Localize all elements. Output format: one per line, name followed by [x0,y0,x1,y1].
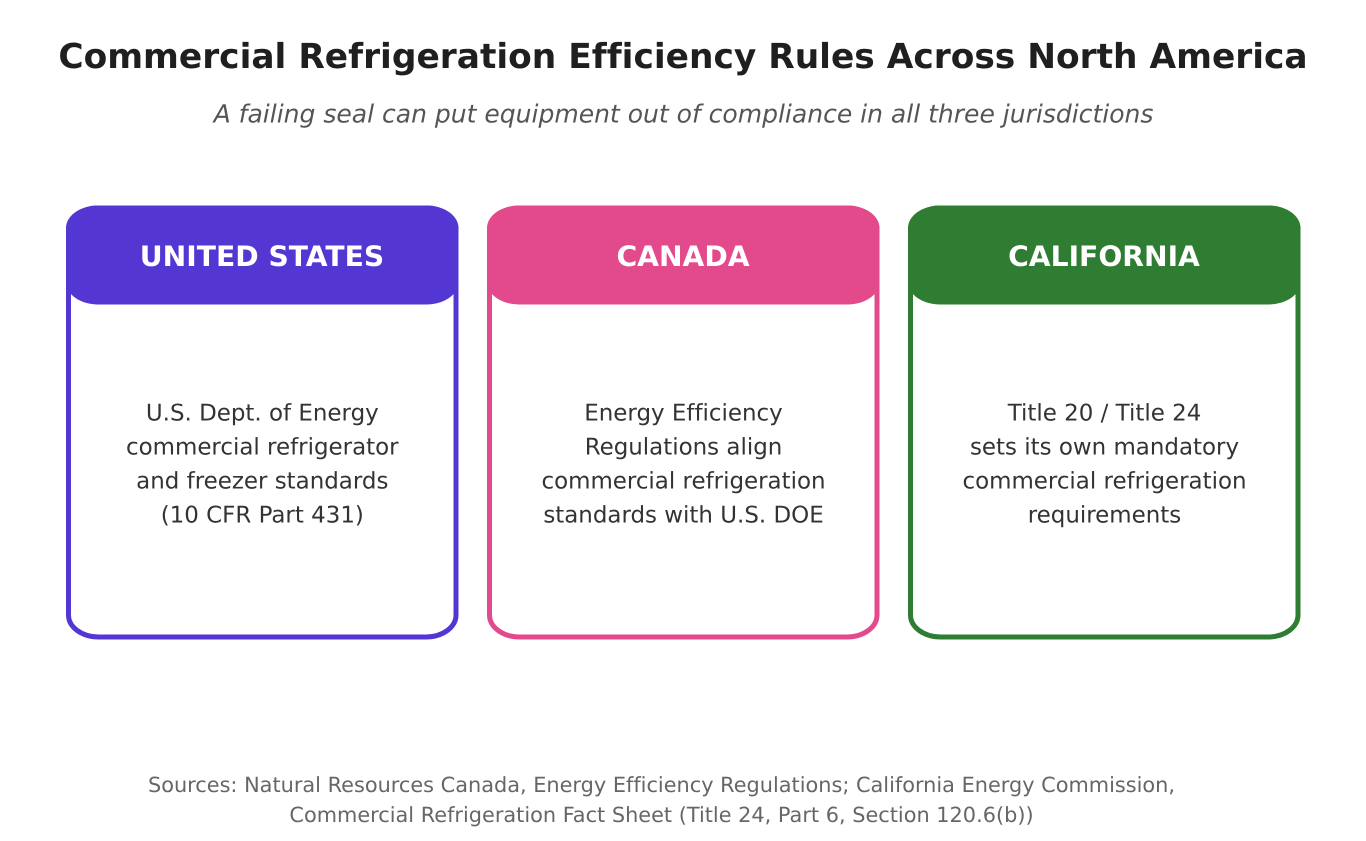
body text: United States: commercial refrigerator [126,434,399,460]
subtitle: A failing seal can put equipment out of compliance in all three jurisdictions [212,100,1153,128]
panel: Canada [487,206,880,637]
card outline: United States [68,208,456,637]
body text: California: requirements [1028,502,1181,528]
body text: United States: (10 CFR Part 431) [161,502,364,528]
body text: United States: and freezer standards [136,468,388,494]
body text: Canada: Energy Efficiency [584,400,783,426]
body text: United States: U.S. Dept. of Energy [146,400,379,426]
body text: Canada: standards with U.S. DOE [543,502,824,528]
body text: California: Title 20 / Title 24 [1007,400,1201,426]
heading: Canada: CANADA [616,240,750,273]
heading: California: CALIFORNIA [1008,240,1200,273]
sources footnote: Commercial Refrigeration Fact Sheet (Title 24, Part 6, Section 120.6(b)) [289,803,1034,827]
card outline: Canada [490,208,877,637]
sources footnote: Sources: Natural Resources Canada, Energy Efficiency Regulations; California Energy Commission, [148,773,1175,797]
body text: California: commercial refrigeration [962,468,1247,494]
body text: Canada: commercial refrigeration [541,468,826,494]
title: Commercial Refrigeration Efficiency Rules Across North America [58,37,1308,77]
header band: United States [66,206,458,304]
body text: California: sets its own mandatory [970,434,1239,460]
body text: Canada: Regulations align [585,434,782,460]
panel: United States [66,206,458,637]
card outline: California [910,208,1298,637]
header band: Canada [487,206,880,304]
header band: California [908,206,1300,304]
heading: United States: UNITED STATES [140,240,384,273]
panel: California [908,206,1300,637]
